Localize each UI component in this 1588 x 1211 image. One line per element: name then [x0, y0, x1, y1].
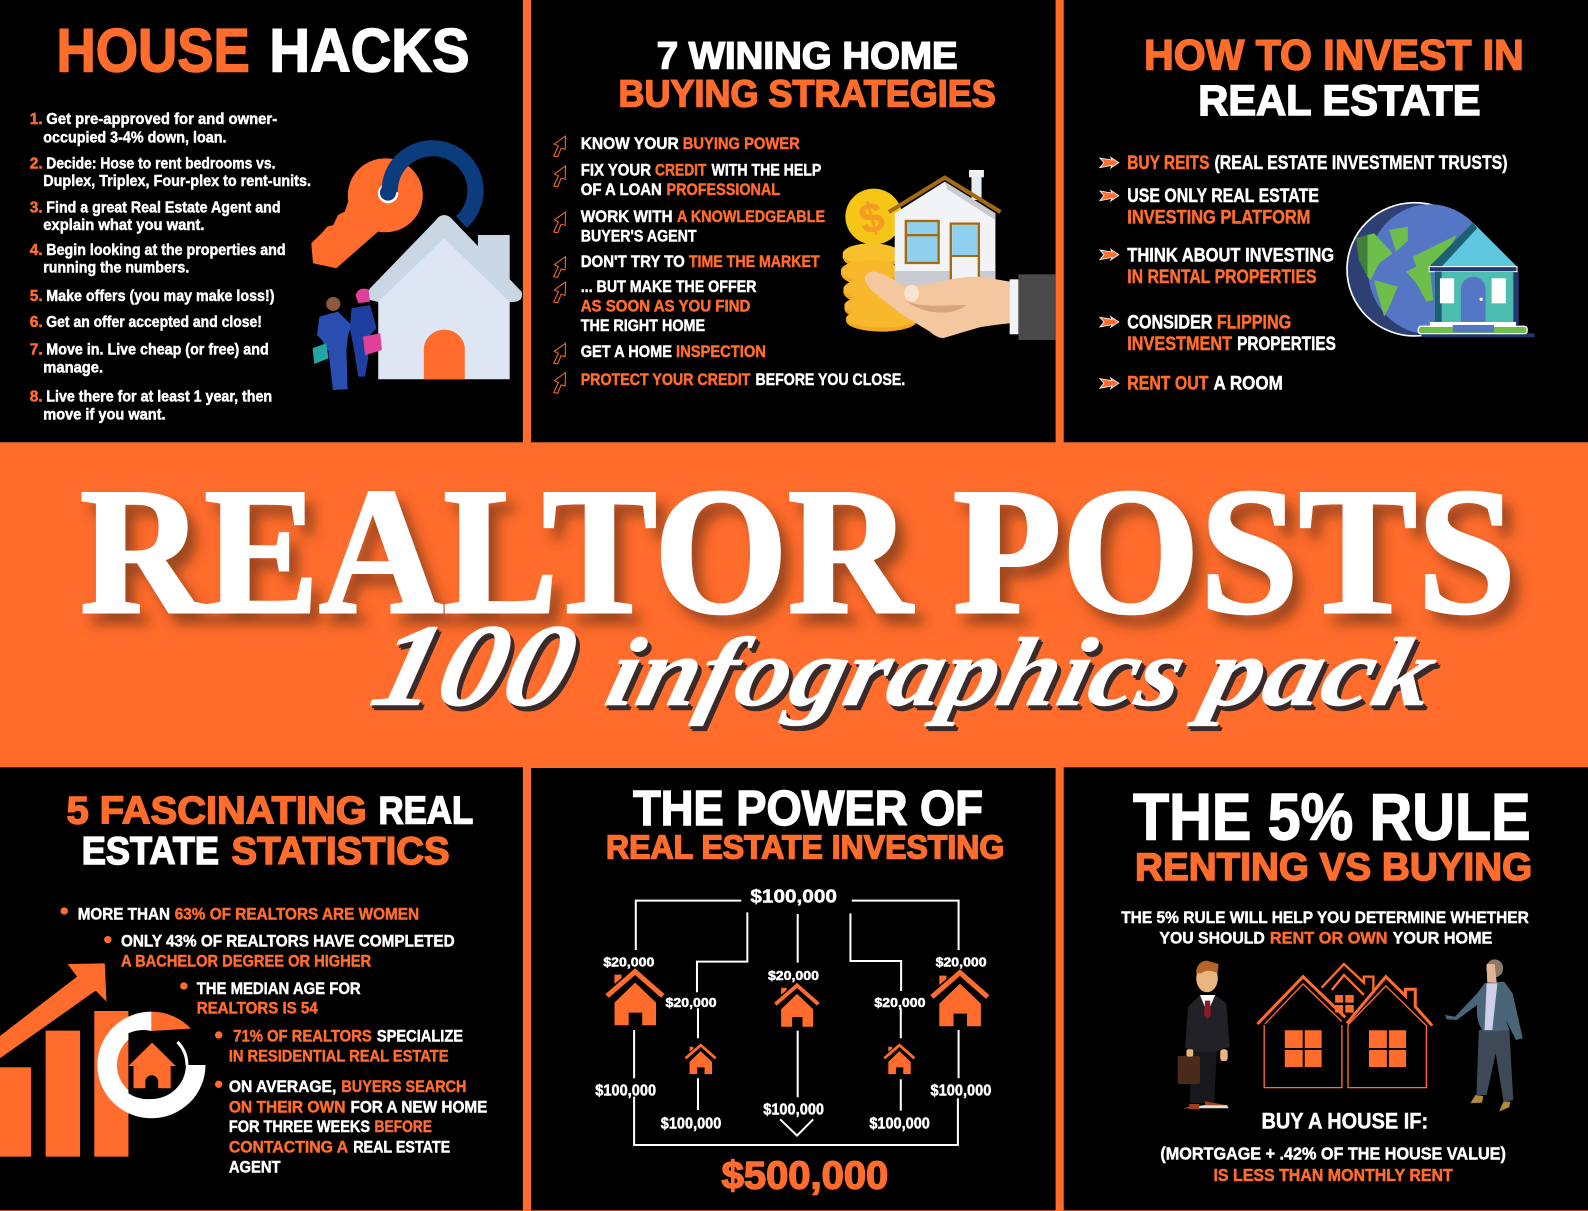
- investing list: THINK ABOUT INVESTING: [1127, 244, 1334, 266]
- numbered list: Begin looking at the properties and: [46, 242, 286, 259]
- strategy list: [581, 134, 905, 389]
- subtitle extrusion: infographics: [599, 620, 1199, 730]
- heading: [619, 35, 996, 116]
- coins: [841, 189, 917, 332]
- numbered list: explain what you want.: [43, 217, 204, 234]
- donut: [97, 1012, 206, 1118]
- strategy list: DON'T TRY TO: [581, 252, 685, 271]
- numbered list: Get an offer accepted and close!: [46, 314, 262, 331]
- amount labels: $20,000: [768, 968, 819, 983]
- house icons: [607, 972, 988, 1074]
- panel: house hacks: [0, 0, 523, 442]
- statistics list: MORE THAN: [78, 904, 170, 923]
- right house: [1347, 977, 1432, 1088]
- strategy list: WITH THE HELP: [712, 161, 821, 180]
- heading: THE POWER OF: [633, 780, 983, 836]
- statistics list: REALTORS IS 54: [197, 999, 318, 1018]
- statistics list: IN RESIDENTIAL REAL ESTATE: [229, 1046, 449, 1065]
- investing list: BUY REITS: [1127, 152, 1209, 174]
- strategy list: GET A HOME: [581, 342, 672, 361]
- subtitle: [361, 600, 1452, 736]
- subtitle face: pack: [1185, 617, 1448, 727]
- panel: how to invest: [1064, 0, 1588, 442]
- heading: house hacks: HOUSE: [56, 17, 250, 85]
- icon: houses outline: [1257, 964, 1432, 1088]
- closing text: BUY A HOUSE IF:: [1261, 1109, 1428, 1134]
- coins: $: [854, 192, 889, 243]
- investing list: RENT OUT: [1127, 373, 1209, 395]
- intro text: THE 5% RULE WILL HELP YOU DETERMINE WHETHER: [1121, 908, 1529, 927]
- statistics list: 63% OF REALTORS ARE WOMEN: [175, 904, 419, 923]
- numbered list: 1.: [30, 111, 43, 128]
- heading: REAL ESTATE INVESTING: [606, 830, 1004, 866]
- subtitle extrusion: infographics: [601, 622, 1201, 732]
- numbered list: 6.: [30, 314, 43, 331]
- strategy list: AS SOON AS YOU FIND: [581, 297, 750, 316]
- heading: [1133, 781, 1532, 889]
- panel: 5% rule: [1064, 767, 1588, 1210]
- heading: 5 FASCINATING: [67, 790, 367, 832]
- numbered list: Duplex, Triplex, Four-plex to rent-units.: [43, 173, 311, 190]
- bullets: [61, 907, 222, 1088]
- arrow bullets: [1100, 157, 1119, 389]
- icon: man gesturing: [1445, 959, 1523, 1112]
- strategy list: OF A LOAN: [581, 180, 662, 199]
- strategy list: PROTECT YOUR CREDIT: [581, 370, 751, 389]
- chart icon: [0, 963, 206, 1157]
- amount labels: $100,000: [869, 1115, 930, 1132]
- statistics list: BUYERS SEARCH: [341, 1077, 466, 1096]
- intro text: [1121, 908, 1529, 948]
- investing list: USE ONLY REAL ESTATE: [1127, 185, 1319, 207]
- numbered list: move if you want.: [43, 406, 166, 423]
- panel: real estate statistics: [0, 767, 523, 1210]
- amount labels: $20,000: [874, 995, 925, 1010]
- subtitle extrusion: pack: [1187, 620, 1450, 730]
- statistics list: AGENT: [229, 1158, 281, 1177]
- heading: THE 5% RULE: [1133, 781, 1531, 854]
- investing list: INVESTING PLATFORM: [1127, 206, 1310, 228]
- investing list: PROPERTIES: [1237, 333, 1336, 355]
- main title: POSTS: [953, 452, 1516, 652]
- main title: REALTOR: [80, 452, 914, 652]
- numbered list: 2.: [30, 155, 43, 172]
- heading: STATISTICS: [232, 830, 450, 873]
- heading: 7 WINING HOME: [657, 35, 958, 77]
- statistics list: SPECIALIZE: [377, 1027, 463, 1046]
- numbered list: Live there for at least 1 year, then: [46, 389, 272, 406]
- amount labels: $20,000: [666, 995, 717, 1010]
- heading: HOW TO INVEST IN: [1144, 32, 1524, 79]
- icon: key and house with buyers: [311, 148, 522, 390]
- strategy list: BEFORE YOU CLOSE.: [755, 370, 905, 389]
- pointer icons: [554, 136, 565, 393]
- amount labels: $20,000: [603, 955, 654, 970]
- numbered list: manage.: [43, 360, 103, 377]
- heading: RENTING VS BUYING: [1135, 846, 1532, 889]
- strategy list: ... BUT MAKE THE OFFER: [581, 277, 756, 296]
- investing list: INVESTMENT: [1127, 333, 1232, 355]
- heading: REAL: [379, 790, 473, 832]
- panel: power of real estate investing: [531, 768, 1056, 1210]
- statistics list: ON AVERAGE,: [229, 1077, 336, 1096]
- heading: BUYING STRATEGIES: [619, 73, 996, 116]
- intro text: YOU SHOULD: [1159, 929, 1265, 948]
- investing list: A ROOM: [1213, 373, 1283, 395]
- flow diagram: [595, 886, 991, 1145]
- hand: [865, 272, 1056, 340]
- investing list: [1127, 152, 1508, 395]
- buyers: [313, 289, 382, 390]
- strategy list: CREDIT: [655, 161, 707, 180]
- subtitle extrusion: 100: [363, 603, 591, 734]
- strategy list: BUYER'S AGENT: [581, 226, 697, 245]
- heading: REAL ESTATE: [1198, 77, 1480, 125]
- bars: [0, 1011, 128, 1157]
- subtitle face: infographics: [597, 617, 1197, 727]
- amount labels: [595, 886, 991, 1132]
- amount labels: $100,000: [763, 1101, 824, 1118]
- title banner: [80, 452, 1516, 736]
- numbered list: Move in. Live cheap (or free) and: [46, 341, 269, 358]
- middle house: [1322, 964, 1373, 1013]
- statistics list: A BACHELOR DEGREE OR HIGHER: [121, 952, 371, 971]
- left house: [1257, 977, 1345, 1088]
- strategy list: BUYING POWER: [683, 134, 800, 153]
- investing list: IN RENTAL PROPERTIES: [1127, 266, 1317, 288]
- growth arrow: [0, 963, 106, 1058]
- amount labels: $100,000: [595, 1083, 656, 1100]
- statistics list: ONLY 43% OF REALTORS HAVE COMPLETED: [121, 932, 455, 951]
- numbered list: Get pre-approved for and owner-: [46, 111, 277, 128]
- heading: [1144, 32, 1524, 125]
- investing list: (REAL ESTATE INVESTMENT TRUSTS): [1214, 152, 1508, 174]
- statistics list: FOR THREE WEEKS: [229, 1117, 370, 1136]
- strategy list: KNOW YOUR: [581, 134, 679, 153]
- statistics list: REAL ESTATE: [353, 1138, 450, 1157]
- strategy list: THE RIGHT HOME: [581, 316, 705, 335]
- statistics list: FOR A NEW HOME: [351, 1097, 487, 1116]
- numbered list: 4.: [30, 242, 43, 259]
- strategy list: PROFESSIONAL: [667, 180, 780, 199]
- subtitle face: [361, 600, 1448, 731]
- icon: businessman with briefcase: [1178, 961, 1230, 1109]
- numbered list: running the numbers.: [43, 260, 189, 277]
- closing text: [1160, 1109, 1506, 1185]
- amount labels: $100,000: [661, 1115, 721, 1132]
- numbered list: 3.: [30, 199, 43, 216]
- statistics list: BEFORE: [375, 1117, 432, 1136]
- key ring: [378, 148, 476, 222]
- closing text: (MORTGAGE + .42% OF THE HOUSE VALUE): [1160, 1143, 1506, 1163]
- heading: ESTATE: [82, 830, 219, 873]
- intro text: YOUR HOME: [1393, 929, 1492, 948]
- amount labels: $20,000: [936, 955, 987, 970]
- statistics list: 71% OF REALTORS: [233, 1027, 372, 1046]
- house: [1418, 223, 1535, 337]
- statistics list: THE MEDIAN AGE FOR: [197, 979, 361, 998]
- numbered list: occupied 3-4% down, loan.: [43, 129, 226, 146]
- subtitle extrusion: [363, 603, 1452, 736]
- connector lines: [634, 901, 959, 1145]
- heading: [67, 790, 473, 873]
- closing text: IS LESS THAN MONTHLY RENT: [1213, 1165, 1453, 1185]
- numbered list: 7.: [30, 341, 43, 358]
- numbered list: 5.: [30, 288, 43, 305]
- intro text: RENT OR OWN: [1270, 929, 1388, 948]
- numbered list: Find a great Real Estate Agent and: [46, 199, 281, 216]
- key: [311, 158, 423, 268]
- statistics list: CONTACTING A: [229, 1138, 348, 1157]
- heading: house hacks: HACKS: [269, 17, 469, 85]
- house: [368, 215, 522, 379]
- strategy list: TIME THE MARKET: [689, 252, 820, 271]
- subtitle face: 100: [361, 600, 589, 731]
- subtitle extrusion: pack: [1189, 622, 1452, 732]
- statistics list: ON THEIR OWN: [229, 1097, 345, 1116]
- strategy list: A KNOWLEDGEABLE: [677, 207, 825, 226]
- investing list: CONSIDER: [1127, 311, 1212, 333]
- numbered list: 8.: [30, 389, 43, 406]
- statistics list: [78, 904, 487, 1177]
- numbered list: Make offers (you may make loss!): [46, 288, 274, 305]
- icon: globe and house: [1347, 203, 1535, 337]
- total: $500,000: [722, 1155, 888, 1197]
- subtitle extrusion: 100: [365, 605, 593, 736]
- strategy list: FIX YOUR: [581, 161, 651, 180]
- strategy list: WORK WITH: [581, 207, 673, 226]
- icon: house on hand with coins: [841, 170, 1056, 340]
- house: [889, 170, 1000, 287]
- amount labels: $100,000: [750, 886, 837, 907]
- numbered list: [30, 111, 311, 423]
- globe: [1347, 203, 1492, 336]
- investing list: FLIPPING: [1217, 311, 1291, 333]
- strategy list: INSPECTION: [676, 342, 766, 361]
- amount labels: $100,000: [931, 1083, 991, 1100]
- numbered list: Decide: Hose to rent bedrooms vs.: [46, 155, 275, 172]
- heading: [606, 780, 1004, 866]
- panel: home buying strategies: [531, 0, 1056, 442]
